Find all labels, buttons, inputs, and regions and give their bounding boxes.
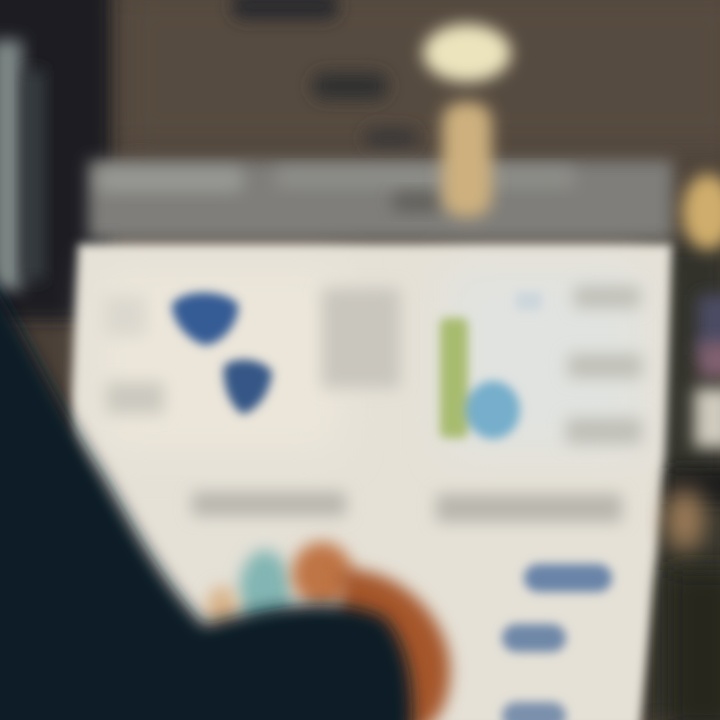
left text block <box>104 296 164 414</box>
icon: blue map blobs <box>172 293 272 414</box>
poster panel <box>70 244 672 720</box>
person silhouette <box>0 250 412 720</box>
lamp glow <box>423 24 720 250</box>
grey banner band <box>88 160 673 240</box>
centre text block <box>322 288 400 388</box>
lower section headings <box>192 492 622 522</box>
bar chart <box>440 292 542 439</box>
blue buttons <box>502 564 612 720</box>
right text lines <box>566 286 642 444</box>
right edge scene <box>665 295 720 720</box>
dark wall marks <box>232 0 417 148</box>
hand and pie chart <box>206 542 450 720</box>
left dark pillar <box>0 0 110 320</box>
